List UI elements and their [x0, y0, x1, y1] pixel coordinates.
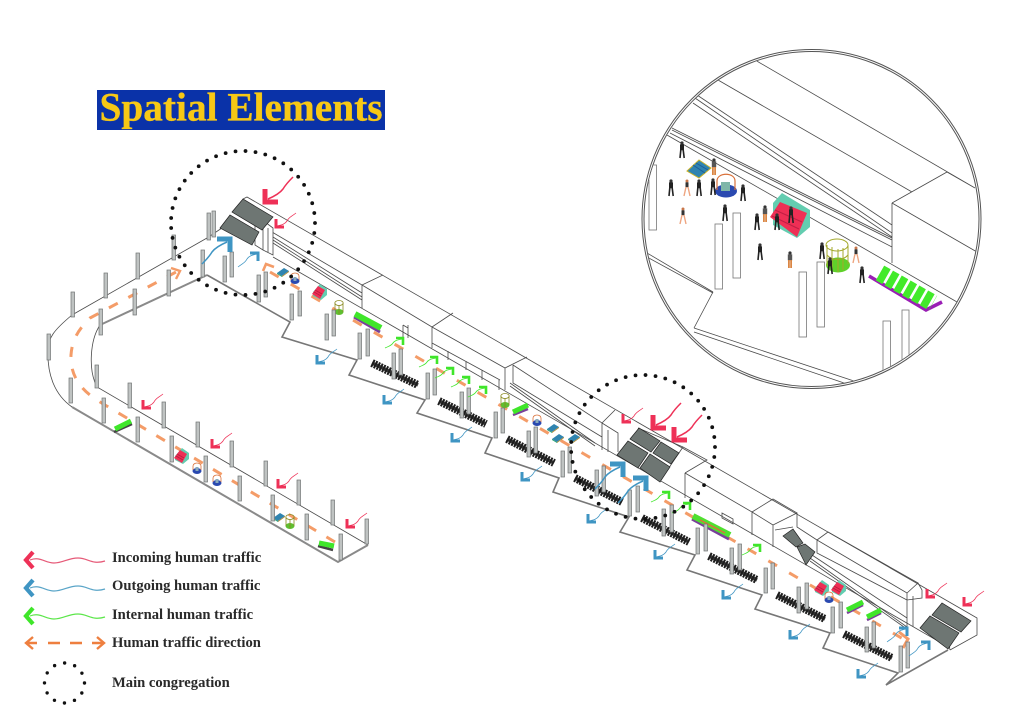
legend: incoming — [26, 550, 262, 568]
ramps and building boxes — [273, 237, 950, 650]
orange traffic direction dashes: main corridor — [263, 264, 908, 648]
legend: outgoing: Outgoing human traffic — [112, 578, 261, 594]
detail furniture: red tiered seat — [770, 193, 810, 238]
legend: congregation — [44, 663, 230, 703]
incoming traffic arrows — [143, 177, 984, 605]
detail architecture lines — [647, 60, 977, 384]
internal traffic arrows — [385, 338, 760, 555]
detail furniture: carousel — [715, 174, 737, 198]
green benches — [114, 314, 881, 620]
stepped waterfront platform — [207, 275, 948, 685]
detail furniture: green cage — [826, 239, 850, 272]
detail columns — [649, 165, 909, 386]
main congregation dotted circle: west entrance — [171, 151, 315, 295]
legend: outgoing — [26, 578, 261, 596]
magnified detail circle — [642, 50, 981, 388]
main congregation dotted circle: central entrance — [571, 375, 715, 519]
legend: internal: Internal human traffic — [112, 607, 254, 623]
isometric plan: main promenade structure — [47, 197, 977, 685]
seating rows — [372, 363, 892, 658]
detail furniture: green stepped bench — [869, 273, 942, 310]
outgoing traffic arrows — [202, 239, 929, 677]
legend: direction — [26, 635, 261, 651]
legend: incoming: Incoming human traffic — [112, 550, 262, 566]
legend: direction: Human traffic direction — [112, 635, 261, 651]
left corridor floor outline — [48, 228, 368, 562]
legend: internal — [26, 607, 254, 624]
stairs: entrance groups — [220, 199, 971, 649]
title: Spatial Elements — [100, 84, 382, 130]
building outline: back and floor lines — [243, 197, 977, 650]
legend — [26, 550, 262, 703]
structural columns — [47, 211, 910, 672]
columns and tower blocks near first stair — [255, 222, 273, 255]
orange traffic direction dashes: left corridor — [71, 268, 335, 542]
detail people — [669, 141, 864, 283]
detail furniture: blue bench — [687, 160, 711, 178]
legend: congregation: Main congregation — [112, 675, 230, 691]
small pavilions and seats — [174, 268, 846, 603]
